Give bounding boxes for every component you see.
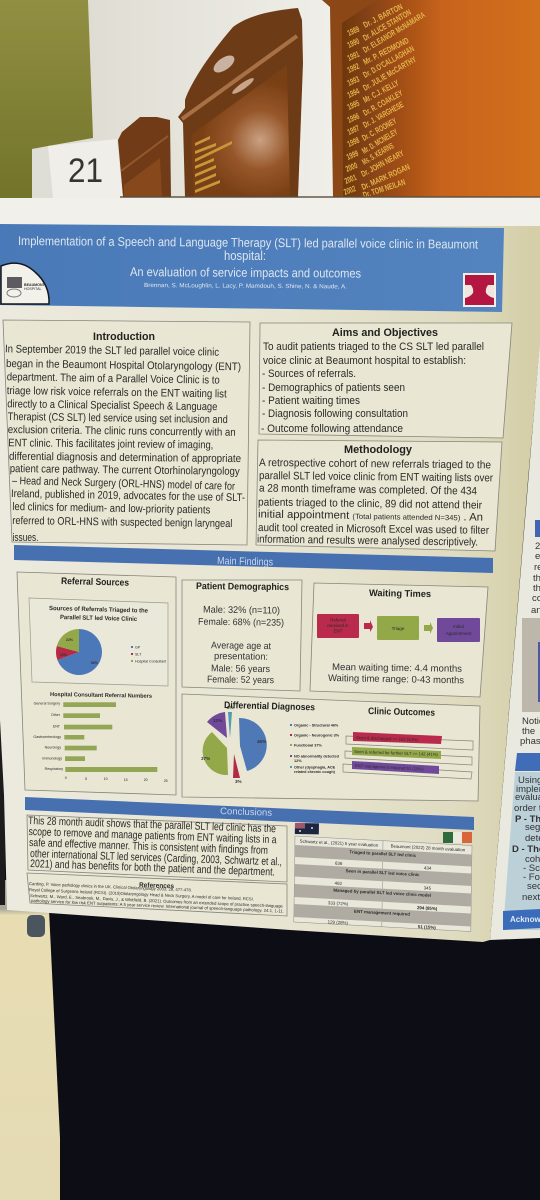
row: ENT management: 51 (15%) bbox=[418, 924, 436, 930]
chart: hospital consultant referral numbers bbox=[33, 692, 168, 783]
row: triaged: 636 bbox=[335, 861, 343, 866]
heading: waiting times: Waiting Times bbox=[369, 588, 431, 600]
wooden honour board small bbox=[118, 117, 171, 197]
axis ticks: 10 bbox=[104, 777, 108, 781]
black display stand bbox=[49, 910, 540, 1200]
pie legend: GP bbox=[135, 646, 141, 650]
wooden honour board large with names: Mr. D. MCNELEY bbox=[360, 126, 399, 156]
introduction body text: directly to a Clinical Specialist Speech & Language bbox=[7, 398, 217, 413]
panel: conclusions text: 2021) and has benefits for both the patient and the department. bbox=[30, 858, 275, 879]
panel: conclusions text: This 28 month audit shows that the parallel SLT led clinic has the bbox=[28, 815, 276, 835]
dark edge at left of poster bbox=[0, 720, 5, 905]
wooden honour board large with names: 1995 bbox=[346, 98, 361, 112]
introduction body text: led clinics for medium- and low-priority patients bbox=[12, 501, 211, 516]
logo: Beaumont Hospital bbox=[1, 263, 49, 304]
wooden honour board large with names: Ms. S. KEARNS bbox=[360, 140, 395, 167]
panel: methodology bbox=[256, 440, 502, 551]
table header: Beaumont (2022) 28 month evaluation bbox=[391, 843, 466, 852]
axis ticks bbox=[65, 776, 168, 783]
row: managed: 333 (72%) bbox=[328, 900, 349, 906]
row: ENT management: ENT management required bbox=[354, 909, 410, 917]
chart legend: 12% bbox=[294, 759, 302, 763]
demographics text bbox=[198, 605, 284, 686]
aims body text: - Diagnosis following consultation bbox=[262, 408, 408, 420]
section bar: main findings bbox=[14, 545, 493, 573]
chart title: Sources of Referrals Triaged to the bbox=[49, 605, 149, 615]
wooden honour board large with names: Dr. R. COAKLEY bbox=[361, 88, 405, 118]
introduction body text bbox=[5, 343, 245, 544]
heading: references: References bbox=[139, 882, 174, 890]
wooden honour board large with names: Mr. C.J. KELLY bbox=[361, 78, 401, 105]
aims body text: - Patient waiting times bbox=[262, 395, 360, 407]
heading: aims and objectives: Aims and Objectives bbox=[332, 327, 438, 339]
axis ticks: 5 bbox=[85, 777, 87, 781]
chart legend: Organic - Structural 46% bbox=[294, 724, 339, 728]
wooden honour board large with names: 1990 bbox=[346, 36, 361, 50]
reference list: Royal College of Surgeons Ireland (RCSI). (2019)Otolaryngology Head & Neck Surgery, A model of care for Ireland, RCSI. bbox=[29, 887, 254, 901]
number card 21: 21 bbox=[68, 152, 103, 190]
demographics text: Female: 52 years bbox=[207, 674, 274, 686]
row: managed: Managed by parallel SLT led voice clinic model bbox=[333, 888, 431, 898]
methodology body text: patients triaged to the clinic, 89 did not attend their bbox=[258, 497, 482, 512]
row: seen: 345 bbox=[424, 885, 432, 891]
introduction body text: In September 2019 the SLT led parallel voice clinic bbox=[5, 343, 220, 359]
methodology body text: information and results were analysed descriptively. bbox=[257, 534, 478, 549]
second poster behind: seg bbox=[525, 822, 540, 833]
bars bbox=[63, 702, 157, 772]
row: triaged: 434 bbox=[424, 865, 432, 871]
chart legend: NO abnormality detected bbox=[294, 754, 340, 758]
wooden honour board large with names: Dr. JOHN NEARY bbox=[359, 148, 406, 179]
bar labels: ENT bbox=[53, 724, 61, 728]
wooden honour board large with names: Dr. D.O'CALLAGHAN bbox=[361, 43, 416, 80]
outcome: ENT management bbox=[343, 761, 472, 779]
panel: conclusions text: safe and effective manner. This is consistent with findings from bbox=[29, 837, 268, 857]
methodology body text bbox=[257, 457, 493, 549]
wooden honour board large with names: 1993 bbox=[346, 74, 361, 88]
authors: Brennan, S. McLoughlin, L. Lacy, P. Mamdouh, S. Shine, N. & Naude, A. bbox=[144, 283, 347, 290]
methodology body text: A retrospective cohort of new referrals triaged to the bbox=[259, 457, 491, 471]
row: seen bbox=[294, 864, 472, 893]
methodology body text: a 28 month timeframe was completed. Of the 434 bbox=[259, 483, 477, 498]
panel: referral sources bbox=[17, 572, 176, 795]
chart legend bbox=[290, 724, 340, 774]
chart: differential diagnoses exploded pie bbox=[201, 705, 267, 784]
flow box: referral received: received in bbox=[327, 623, 349, 628]
logo: Beaumont Hospital: HOSPITAL bbox=[24, 287, 42, 291]
pie slices: 22% bbox=[66, 638, 74, 642]
chart legend: Other (dysphagia, ACE bbox=[294, 766, 336, 770]
wooden honour board large with names: Dr. J. VARGHESE bbox=[361, 99, 406, 130]
row: seen: Seen in parallel SLT led voice clinic bbox=[346, 868, 420, 877]
heading: differential diagnoses: Differential Diagnoses bbox=[224, 700, 315, 713]
wooden honour board large with names: Dr. C. ROONEY bbox=[360, 115, 398, 143]
flow box: triage: Triage bbox=[392, 626, 405, 631]
pie slices: 12% bbox=[60, 653, 68, 657]
flow box: referral received: Referral bbox=[330, 618, 346, 622]
bar labels: Gastroenterology bbox=[33, 735, 61, 739]
chart: differential diagnoses exploded pie: 3% bbox=[235, 779, 242, 784]
panel: references bbox=[27, 873, 287, 916]
introduction body text: ENT clinic. This facilitates joint review of imaging, bbox=[8, 437, 213, 451]
reference list: pathology service for low risk ENT outpatients: A 5 year service review. International journal of speech-language pathology. 24:1, 1-11. bbox=[31, 898, 284, 914]
panel: conclusions text bbox=[27, 815, 287, 882]
table header: Schwartz et al., (2021) 5 year evaluation bbox=[300, 839, 379, 848]
chart: differential diagnoses exploded pie: 46% bbox=[257, 739, 266, 744]
wooden honour board large with names: Mr. P. REDMOND bbox=[361, 35, 410, 67]
number card 21 bbox=[32, 139, 123, 198]
logo: Beaumont Hospital: BEAUMONT bbox=[24, 283, 46, 287]
flag: Ireland bbox=[443, 832, 472, 843]
panel: differential diagnoses and clinic outcomes bbox=[182, 694, 480, 801]
introduction body text: triage low risk voice referrals on the ENT waiting list bbox=[7, 385, 227, 400]
introduction body text: – Head and Neck Surgery (ORL-HNS) model of care for bbox=[12, 475, 235, 493]
waiting time statistics: Mean waiting time: 4.4 months bbox=[332, 662, 462, 675]
reference list: Carding, P. Voice pathology clinics in the UK. Clinical Otolaryngology 2003; 28, 477-478. bbox=[29, 881, 192, 893]
heading: patient demographics: Patient Demographics bbox=[196, 581, 289, 593]
second poster behind: coh bbox=[525, 854, 540, 865]
outcome: seen and discharged: Seen & discharged >> 152 (44%) bbox=[356, 735, 419, 742]
heading: introduction: Introduction bbox=[93, 331, 155, 343]
row: triaged bbox=[295, 845, 472, 873]
main poster sheet bbox=[0, 198, 540, 942]
section bar: main findings: Main Findings bbox=[217, 555, 273, 568]
aims body text: voice clinic at Beaumont hospital to establish: bbox=[263, 355, 466, 367]
introduction body text: patient care pathway. The current Otorhinolaryngology bbox=[10, 463, 240, 478]
title line 3: An evaluation of service impacts and outcomes bbox=[130, 265, 361, 281]
chart: differential diagnoses exploded pie: 3% bbox=[227, 705, 234, 710]
panel: conclusions text: other international SLT led services (Carding, 2003, Schwartz et al., bbox=[30, 848, 282, 868]
demographics text: presentation: bbox=[214, 651, 268, 663]
row: triaged: Triaged to parallel SLT led clinic bbox=[349, 849, 417, 858]
row: managed: 294 (85%) bbox=[417, 905, 438, 911]
wooden honour board large with names: 1996 bbox=[346, 111, 361, 125]
second poster behind: the bbox=[522, 726, 535, 737]
wooden honour board large with names: 1997 bbox=[346, 123, 361, 137]
wooden honour board large with names: 2001 bbox=[343, 172, 358, 186]
wall background bbox=[0, 0, 540, 200]
title line 1: Implementation of a Speech and Language Therapy (SLT) led parallel voice clinic in Beaumont bbox=[18, 234, 479, 252]
poster top edge shadow bbox=[120, 196, 540, 198]
bar labels: Neurology bbox=[45, 746, 61, 750]
chart legend: Organic - Neurogenic 3% bbox=[294, 734, 340, 738]
chart title: Parallel SLT led Voice Clinic bbox=[60, 614, 138, 623]
bar labels bbox=[33, 702, 63, 771]
axis ticks: 0 bbox=[65, 776, 67, 780]
olive wall section bbox=[0, 0, 93, 198]
wooden honour board large with names: Dr. TOM NEILAN bbox=[362, 177, 406, 200]
pie legend: SLT bbox=[135, 652, 142, 656]
outcome: seen and discharged bbox=[346, 732, 473, 750]
axis ticks: 25 bbox=[164, 779, 168, 783]
introduction body text: referred to ORL-HNS with suspected benign laryngeal bbox=[12, 515, 232, 530]
bar labels: Immunology bbox=[42, 756, 62, 760]
flow box: initial appointment: Appointment bbox=[446, 631, 472, 636]
wooden honour board large with names bbox=[322, 0, 540, 200]
outcome: seen and referred: Seen & referred for further SLT >> 142 (41%) bbox=[354, 749, 439, 757]
reference list bbox=[29, 881, 284, 914]
wooden honour board large with names: Dr. MARK ROGAN bbox=[360, 162, 411, 192]
panel: patient demographics bbox=[182, 580, 302, 691]
waiting time statistics bbox=[328, 662, 464, 686]
axis ticks: 15 bbox=[124, 778, 128, 782]
wooden honour board large with names: 1994 bbox=[346, 86, 361, 100]
demographics text: Female: 68% (n=235) bbox=[198, 617, 284, 629]
outcome: seen and referred bbox=[345, 747, 472, 765]
aims body text: To audit patients triaged to the CS SLT led parallel bbox=[263, 341, 484, 353]
demographics text: Average age at bbox=[211, 640, 271, 652]
wooden honour board large with names: Dr. JULIE McCARTHY bbox=[361, 54, 418, 93]
bar labels: General Surgery bbox=[34, 702, 60, 706]
row: managed bbox=[294, 884, 471, 913]
panel: aims and objectives bbox=[259, 323, 512, 438]
logo: crimson square bbox=[463, 273, 496, 307]
aims body text: - Sources of referrals. bbox=[262, 368, 356, 380]
flow box: initial appointment bbox=[437, 618, 480, 642]
demographics text: Male: 32% (n=110) bbox=[203, 605, 280, 617]
bar labels: Respiratory bbox=[45, 767, 63, 771]
introduction body text: Ireland, published in 2019, advocates for the use of SLT- bbox=[11, 488, 245, 504]
second poster behind bbox=[490, 340, 540, 940]
pie legend: Hospital Consultant bbox=[135, 660, 166, 664]
wooden honour board large with names: 1999 bbox=[345, 148, 360, 162]
reference list: Schwartz, M., Ward, E., Seabrook, M., Davis, J., & Whitfield, B. (2021). Outcomes from an extended scope of practice speech-language bbox=[30, 893, 284, 909]
section bar: conclusions: Conclusions bbox=[220, 806, 272, 819]
demographics text: Male: 56 years bbox=[211, 663, 270, 675]
chart: differential diagnoses exploded pie: 12% bbox=[213, 718, 222, 723]
heading: clinic outcomes: Clinic Outcomes bbox=[368, 706, 435, 719]
row: ENT management: 129 (28%) bbox=[328, 919, 349, 925]
introduction body text: department. The aim of a Parallel Voice Clinic is to bbox=[7, 371, 220, 387]
arrow: to triage bbox=[364, 620, 373, 632]
panel: introduction bbox=[3, 320, 250, 545]
wooden honour board large with names: 1992 bbox=[346, 61, 361, 75]
poster top margin lighter band bbox=[0, 198, 540, 226]
chart legend: related chronic cough) bbox=[294, 770, 336, 774]
chart: hospital consultant referral numbers: Hospital Consultant Referral Numbers bbox=[50, 692, 152, 700]
wooden honour board large with names: 2000 bbox=[344, 160, 359, 174]
panel: conclusions text: scope to remove and manage patients from ENT waiting lists in a bbox=[28, 826, 277, 846]
introduction body text: began in the Beaumont Hospital Otolaryngology (ENT) bbox=[6, 358, 241, 373]
flow box: referral received: ENT bbox=[334, 628, 343, 634]
second poster behind: next bbox=[522, 892, 540, 903]
methodology body text: audit tool created in Microsoft Excel was used to filter bbox=[258, 522, 489, 537]
poster clip bbox=[27, 915, 45, 937]
aims body text: - Outcome following attendance bbox=[261, 423, 403, 435]
wooden honour board large with names: 1998 bbox=[346, 135, 361, 149]
outcome: ENT management: ENT management required 51 (15%) bbox=[355, 763, 424, 772]
panel: waiting times bbox=[310, 583, 488, 697]
heading: methodology: Methodology bbox=[344, 444, 413, 456]
row: ENT management bbox=[294, 904, 471, 932]
wooden honour board medium bbox=[178, 8, 303, 197]
pie slices bbox=[56, 629, 102, 675]
flow box: referral received bbox=[317, 614, 359, 638]
axis ticks: 20 bbox=[144, 778, 148, 782]
chart: sources of referrals pie bbox=[29, 598, 168, 686]
arrow: to initial appointment bbox=[424, 622, 433, 634]
comparison table bbox=[294, 836, 472, 932]
waiting time statistics: Waiting time range: 0-43 months bbox=[328, 673, 464, 686]
aims body text: - Demographics of patients seen bbox=[262, 382, 405, 394]
chart legend: Functional 37% bbox=[294, 744, 322, 748]
chart: differential diagnoses exploded pie: 37% bbox=[201, 756, 210, 761]
wooden honour board large with names: 1989 bbox=[346, 24, 361, 38]
introduction body text: issues. bbox=[12, 532, 38, 544]
title line 2: hospital: bbox=[224, 249, 266, 263]
introduction body text: exclusion criteria. The clinic runs concurrently with an bbox=[8, 424, 236, 439]
methodology body text: initial appointment (Total patients attended N=345) . An bbox=[258, 509, 483, 524]
title banner bbox=[0, 224, 504, 312]
heading: referral sources: Referral Sources bbox=[61, 576, 129, 589]
pie slices: 66% bbox=[91, 661, 99, 665]
introduction body text: Therapist (CS SLT) led service using set inclusion and bbox=[8, 411, 228, 426]
flow box: initial appointment: Initial bbox=[453, 624, 464, 629]
table header bbox=[300, 836, 466, 854]
introduction body text: differential diagnosis and determination of appropriate bbox=[9, 451, 241, 465]
pie legend bbox=[131, 646, 166, 664]
bar labels: Other bbox=[51, 713, 61, 717]
wooden honour board large with names: 2002 bbox=[342, 183, 357, 197]
flow box: triage bbox=[377, 616, 419, 640]
chart title bbox=[49, 605, 149, 623]
section bar: conclusions bbox=[25, 797, 474, 830]
floor bbox=[0, 880, 60, 1200]
aims body text bbox=[261, 341, 484, 435]
methodology body text: parallel SLT led voice clinic from ENT waiting lists over bbox=[259, 470, 493, 484]
flag: Australia bbox=[295, 823, 319, 834]
wooden honour board large with names: 1991 bbox=[346, 49, 361, 63]
row: seen: 462 bbox=[335, 881, 343, 886]
